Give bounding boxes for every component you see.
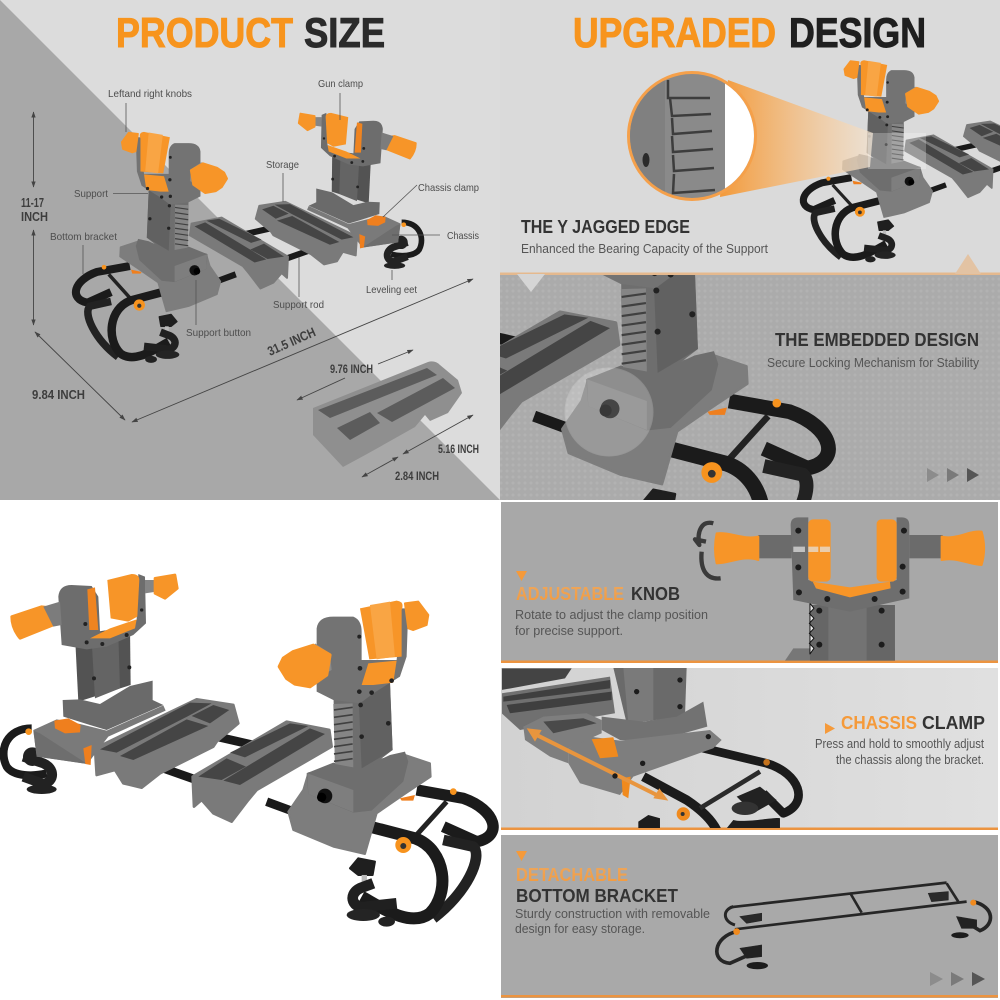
panel background [501,835,998,998]
caption: for precise support. [515,623,623,638]
heading: the y jagged edge: THE Y JAGGED EDGE [521,217,690,237]
notch up [955,254,981,274]
panel background [501,668,998,828]
dimension labels [21,195,479,483]
caption: Secure Locking Mechanism for Stability [767,355,979,370]
storage tray [313,361,462,467]
panel: detachable bottom bracket [501,835,998,998]
magnifier ring [627,71,757,201]
dimension labels: 9.84 INCH [32,387,85,402]
caption [815,736,984,767]
white background [0,500,500,1000]
part labels: Leveling eet [366,284,417,296]
dimension labels: 11-17 [21,195,44,210]
arrows [927,468,979,482]
title word: size: SIZE [304,9,385,56]
orange base line [501,660,998,663]
part labels: Support rod [273,299,324,311]
part labels: Storage [266,159,299,171]
panel background [500,274,1000,500]
caption: design for easy storage. [515,921,645,936]
caption [515,906,710,936]
orange base line [501,828,998,830]
translucent highlight on stand [868,133,926,169]
notch down [517,274,545,292]
heading: knob: KNOB [631,584,680,604]
panel: product size [0,0,500,500]
dimension labels: 9.76 INCH [330,364,373,376]
dimension labels: 2.84 INCH [395,471,439,483]
divider with notches [500,272,1000,275]
dimension labels: 31.5 INCH [265,324,318,359]
panel: embedded design [500,254,1000,500]
dimension labels: 5.16 INCH [438,444,479,456]
part labels: Support [74,188,108,200]
heading: the embedded design: THE EMBEDDED DESIGN [775,330,979,350]
title: PRODUCT [116,9,293,56]
heading: clamp: CLAMP [922,713,985,733]
title word: design: DESIGN [789,9,926,56]
product illustration [76,113,421,363]
panel background [500,0,1000,274]
panel: upgraded design [500,0,1000,274]
title: UPGRADED [573,9,776,56]
icon: triangle marker [516,851,527,861]
panel: product photo [0,500,500,1000]
orange base line [501,995,998,998]
part labels: Support button [186,327,251,339]
caption: Sturdy construction with removable [515,906,710,921]
magnifier beam [720,80,873,197]
dimension arrows [34,112,473,477]
panel: adjustable knob [501,502,998,663]
arrows [930,972,985,986]
panel background [501,502,998,662]
magnified jagged edge [630,74,754,198]
caption [515,607,708,638]
heading: chassis: CHASSIS [841,713,917,733]
magnifier on support button [565,368,653,456]
part labels: Gun clamp [318,78,363,90]
part labels [50,78,479,339]
icon: triangle marker [825,723,835,734]
panel background [0,0,500,500]
small product illustration [803,44,1000,262]
clamp head front view [695,517,984,661]
main product illustration [4,574,493,927]
heading: adjustable: ADJUSTABLE [516,584,624,604]
chassis close-up illustration [502,668,799,830]
part labels: Chassis [447,230,479,242]
part labels: Leftand right knobs [108,88,192,100]
icon: triangle marker [516,571,527,581]
close-up product [500,275,836,500]
dimension labels: INCH [21,209,48,224]
diagonal dark background [0,0,500,500]
bracket illustration [717,883,990,969]
heading: detachable: DETACHABLE [516,865,628,885]
part labels: Chassis clamp [418,182,479,194]
part labels: Bottom bracket [50,231,117,243]
caption: Enhanced the Bearing Capacity of the Support [521,241,768,256]
caption: Rotate to adjust the clamp position [515,607,708,622]
heading: bottom bracket: BOTTOM BRACKET [516,886,678,906]
panel: chassis clamp [501,668,998,830]
